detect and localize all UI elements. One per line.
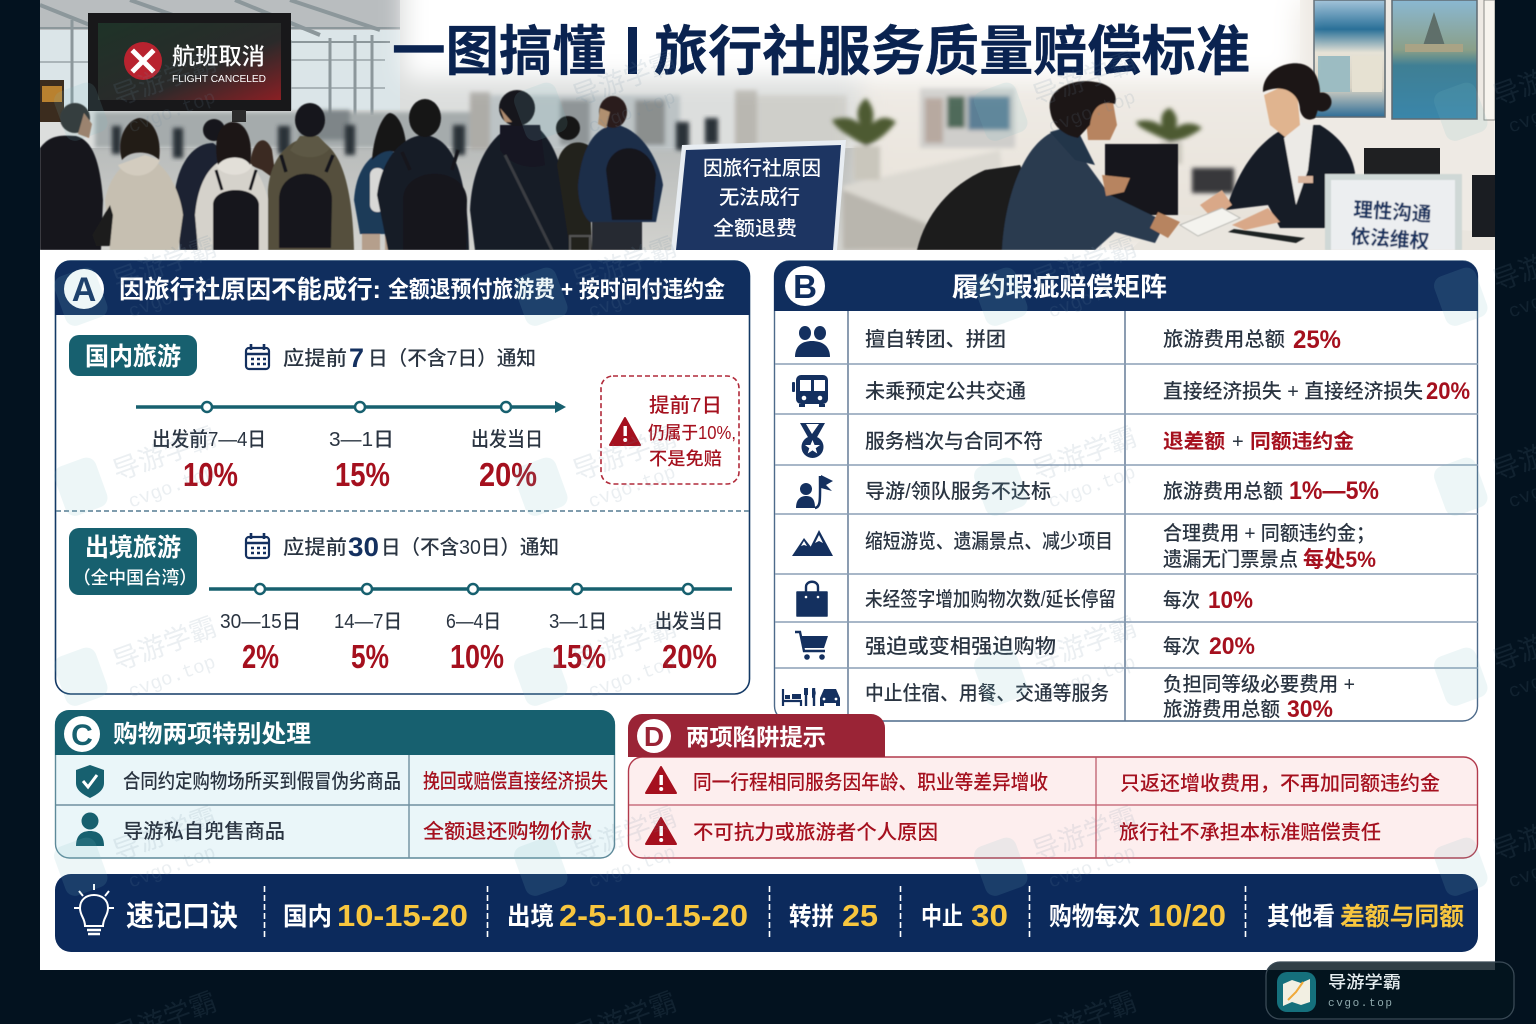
- row: counterfeit goods: 挽回或赔偿直接经济损失: [423, 770, 608, 793]
- outbound tag: [69, 528, 197, 595]
- outbound compensation tiers: 10%: [450, 638, 504, 675]
- outbound timeline: [209, 584, 732, 594]
- desk sign: rational communication: 依法维权: [1350, 225, 1430, 253]
- icon: medal: [800, 423, 825, 458]
- mnemonic: transfer: 转拼: [789, 903, 834, 931]
- domestic timeline: [136, 401, 566, 413]
- brand badge: [1266, 962, 1514, 1019]
- watermark pattern: cvgo.top: [1046, 87, 1139, 138]
- traveller behind woman: [250, 140, 276, 180]
- traveller 4: [195, 122, 274, 250]
- watermark pattern: cvgo.top: [126, 462, 219, 513]
- mnemonic: domestic: 国内: [283, 903, 332, 931]
- watermark pattern: cvgo.top: [586, 462, 679, 513]
- outbound compensation tiers: 30—15日: [220, 611, 301, 633]
- row: service grade: 服务档次与合同不符: [865, 430, 1043, 453]
- outbound compensation tiers: 6—4日: [446, 611, 501, 633]
- row: shortened itinerary: 每处5%: [1303, 547, 1376, 572]
- panel A header: 全额退预付旅游费 + 按时间付违约金: [388, 276, 725, 302]
- mnemonic: others: 差额与同额: [1340, 903, 1464, 931]
- mnemonic: outbound: 出境: [507, 903, 554, 931]
- panel C header: 购物两项特别处理: [113, 721, 311, 748]
- mnemonic: others: 其他看: [1267, 903, 1335, 931]
- icon: calendar: [246, 344, 269, 369]
- blue refund notice sign: 全额退费: [713, 217, 797, 240]
- queue of travellers seen from behind: [40, 90, 663, 250]
- icon: warning: [646, 767, 676, 793]
- panel C header: C: [71, 719, 93, 752]
- brand badge: cvgo.top: [1328, 998, 1392, 1010]
- office wall background: [832, 0, 1500, 250]
- row: public transport: [792, 375, 1470, 407]
- outbound notice: 应提前: [283, 536, 347, 559]
- row: forced shopping: [795, 632, 1255, 660]
- watermark pattern: cvgo.top: [586, 652, 679, 703]
- domestic notice: 日（不含7日）通知: [368, 347, 536, 370]
- blue refund notice sign: 因旅行社原因: [703, 157, 821, 180]
- row: unauthorised group transfer: [795, 326, 1341, 357]
- watermark pattern: 导游学霸: [1029, 801, 1141, 867]
- row: guide private sales: 导游私自兜售商品: [123, 820, 285, 843]
- row: counterfeit goods: [76, 765, 608, 798]
- row: shortened itinerary: 合理费用 + 同额违约金；: [1163, 522, 1375, 545]
- outbound compensation tiers: 3—1日: [549, 611, 607, 633]
- row: service grade: +: [1232, 431, 1244, 453]
- icon: bed, fork and car: [783, 688, 840, 706]
- traveller 2: [92, 118, 183, 250]
- panel B header: B: [793, 268, 817, 305]
- watermark pattern: 导游学霸: [109, 231, 221, 297]
- watermark pattern: 导游学霸: [569, 801, 681, 867]
- row: extra shopping: [797, 582, 1253, 616]
- outbound tag: 出境旅游: [85, 534, 181, 562]
- watermark pattern: 导游学霸: [1029, 611, 1141, 677]
- icon: red x: [124, 42, 162, 80]
- row: public transport: 直接经济损失 + 直接经济损失: [1163, 380, 1423, 403]
- travel posters: [1314, 0, 1495, 120]
- row: forced shopping: 20%: [1209, 633, 1255, 660]
- row: suspended services: 30%: [1287, 696, 1333, 723]
- outbound compensation tiers: 20%: [662, 638, 717, 675]
- watermark pattern: cvgo.top: [1046, 462, 1139, 513]
- title: [392, 22, 1250, 82]
- panel C: shopping special cases: [55, 710, 615, 858]
- counter desk: [1130, 246, 1300, 250]
- traveller 9: [556, 116, 592, 250]
- mnemonic bar: 速记口诀: [126, 900, 238, 933]
- row: guide standard: 1%—5%: [1289, 477, 1379, 505]
- icon: shield: [76, 765, 104, 798]
- callout: seven days note: 提前7日: [649, 394, 722, 417]
- title: 一图搞懂: [392, 22, 606, 82]
- domestic compensation tiers: 10%: [183, 456, 238, 493]
- watermark pattern: 导游学霸: [1029, 46, 1141, 112]
- mnemonic: outbound: 2-5-10-15-20: [559, 898, 748, 933]
- mnemonic: suspension: 30: [971, 898, 1008, 933]
- icon: light bulb: [74, 884, 114, 934]
- title: 旅行社服务质量赔偿标准: [654, 22, 1250, 82]
- watermark pattern: cvgo.top: [586, 272, 679, 323]
- mnemonic: suspension: [921, 898, 1008, 933]
- watermark pattern: 导游学霸: [109, 421, 221, 487]
- row: suspended services: 旅游费用总额: [1163, 698, 1280, 721]
- row: shortened itinerary: [792, 522, 1376, 572]
- icon: shopping bag: [797, 582, 827, 616]
- desk sign: rational communication: [1325, 174, 1462, 253]
- header banner photo scene: [40, 0, 1500, 253]
- row: price discrimination: 同一行程相同服务因年龄、职业等差异增收: [693, 771, 1048, 794]
- row: guide private sales: [76, 812, 592, 846]
- icon: calendar: [246, 533, 269, 558]
- watermark pattern: cvgo.top: [126, 87, 219, 138]
- domestic notice: 7: [349, 343, 364, 373]
- watermark pattern: cvgo.top: [126, 272, 219, 323]
- row: guide standard: [796, 475, 1379, 508]
- panel D header tab: [628, 714, 885, 757]
- row: service grade: 同额违约金: [1250, 429, 1354, 453]
- domestic compensation tiers: 15%: [335, 456, 390, 493]
- watermark pattern: cvgo.top: [586, 87, 679, 138]
- back monitor: [1364, 148, 1440, 175]
- blue refund notice sign: [671, 140, 846, 250]
- icon: person: [76, 812, 104, 846]
- icon: bus: [792, 375, 828, 407]
- suitcase handle: [570, 236, 590, 250]
- row: force majeure: [646, 818, 1381, 844]
- mnemonic: others: [1267, 903, 1464, 931]
- row: shortened itinerary: 缩短游览、遗漏景点、减少项目: [865, 530, 1113, 553]
- traveller 5: [268, 103, 354, 250]
- domestic compensation tiers: 3—1日: [329, 429, 394, 451]
- panel C header: [55, 710, 615, 755]
- mnemonic bar: [55, 874, 1478, 952]
- outbound compensation tiers: 5%: [351, 638, 389, 675]
- row: force majeure: 旅行社不承担本标准赔偿责任: [1119, 821, 1381, 844]
- row: extra shopping: 10%: [1208, 587, 1253, 614]
- contract paper: [1180, 208, 1240, 236]
- icon: warning: [646, 818, 676, 844]
- mnemonic: transfer: [789, 898, 878, 933]
- watermark pattern: cvgo.top: [1046, 842, 1139, 893]
- traveller 8: [470, 90, 571, 250]
- traveller 10: [578, 96, 663, 250]
- mnemonic: domestic: [283, 898, 468, 933]
- panel A header: 因旅行社原因不能成行:: [119, 276, 381, 304]
- watermark pattern: 导游学霸: [569, 46, 681, 112]
- traveller 7: [377, 99, 469, 250]
- domestic tag: 国内旅游: [85, 343, 181, 371]
- traveller 6: [354, 113, 406, 250]
- panel B header: [774, 261, 1478, 311]
- traveller 1: [40, 103, 103, 250]
- white title fade: [405, 0, 1295, 78]
- row: force majeure: 不可抗力或旅游者个人原因: [693, 821, 938, 844]
- icon: warning: [610, 418, 640, 445]
- row: counterfeit goods: 合同约定购物场所买到假冒伪劣商品: [123, 770, 401, 793]
- potted plants: [832, 98, 1202, 180]
- watermark pattern: cvgo.top: [1046, 652, 1139, 703]
- watermark pattern: 导游学霸: [569, 231, 681, 297]
- consultant: [1200, 63, 1356, 230]
- flight cancelled sign: [88, 13, 291, 122]
- row: public transport: 20%: [1426, 378, 1470, 405]
- panel A header: [55, 261, 750, 315]
- flight cancelled sign: FLIGHT CANCELED: [172, 73, 266, 85]
- outbound compensation tiers: 14—7日: [334, 611, 402, 633]
- mnemonic: shopping: 10/20: [1148, 898, 1226, 933]
- watermark pattern: 导游学霸: [569, 611, 681, 677]
- row: guide standard: 旅游费用总额: [1163, 480, 1283, 503]
- row: suspended services: [783, 673, 1355, 723]
- callout: seven days note: [601, 376, 739, 484]
- callout: seven days note: 仍属于10%,: [648, 423, 736, 443]
- row: public transport: 未乘预定公共交通: [865, 380, 1026, 403]
- watermark pattern: 导游学霸: [569, 421, 681, 487]
- panel A: cannot depart: [55, 261, 750, 694]
- mnemonic: transfer: 25: [842, 898, 878, 933]
- blue refund notice sign: 无法成行: [719, 186, 800, 209]
- domestic compensation tiers: 出发前7—4日: [152, 428, 266, 451]
- airport hall background: [40, 0, 900, 250]
- watermark pattern: 导游学霸: [109, 46, 221, 112]
- row: extra shopping: 未经签字增加购物次数/延长停留: [865, 588, 1116, 611]
- tablet: [1228, 229, 1305, 243]
- desk sign: rational communication: 理性沟通: [1353, 198, 1432, 226]
- brand badge: 导游学霸: [1328, 972, 1401, 992]
- row: unauthorised group transfer: 擅自转团、拼团: [865, 328, 1006, 351]
- service counter scene: [917, 63, 1462, 253]
- mnemonic: shopping: [1049, 898, 1226, 933]
- monitor: [1105, 144, 1178, 215]
- watermark pattern: cvgo.top: [126, 842, 219, 893]
- row: suspended services: 中止住宿、用餐、交通等服务: [865, 682, 1109, 705]
- outbound notice: 日（不含30日）通知: [381, 536, 559, 559]
- callout: seven days note: 不是免赔: [649, 449, 722, 469]
- watermark pattern: cvgo.top: [126, 652, 219, 703]
- outbound compensation tiers: 2%: [242, 638, 279, 675]
- watermark pattern: 导游学霸: [109, 611, 221, 677]
- watermark pattern: cvgo.top: [586, 842, 679, 893]
- panel B: defect compensation matrix: [774, 261, 1478, 723]
- icon: map logo: [1277, 972, 1316, 1012]
- domestic notice: 应提前: [283, 347, 347, 370]
- domestic notice: [283, 343, 536, 373]
- panel B header: 履约瑕疵赔偿矩阵: [952, 272, 1167, 302]
- panel A header: A: [72, 271, 96, 309]
- row: price discrimination: [646, 767, 1440, 795]
- row: guide standard: 导游/领队服务不达标: [865, 480, 1051, 503]
- outbound compensation tiers: 出发当日: [655, 610, 723, 633]
- row: forced shopping: 强迫或变相强迫购物: [865, 635, 1056, 658]
- customer: [917, 81, 1180, 250]
- icon: people: [795, 326, 830, 357]
- outbound tag: （全中国台湾）: [73, 567, 197, 588]
- watermark pattern: 导游学霸: [1029, 421, 1141, 487]
- row: extra shopping: 每次: [1163, 589, 1200, 612]
- watermark pattern: cvgo.top: [1046, 272, 1139, 323]
- row: service grade: [800, 423, 1354, 458]
- watermark pattern: 导游学霸: [1029, 231, 1141, 297]
- outbound notice: [283, 532, 559, 562]
- outbound notice: 30: [348, 532, 379, 562]
- icon: guide with flag: [796, 475, 833, 508]
- row: service grade: 退差额: [1163, 430, 1225, 453]
- panel D header tab: 两项陷阱提示: [686, 724, 826, 750]
- row: unauthorised group transfer: 25%: [1293, 326, 1341, 354]
- domestic compensation tiers: 出发当日: [471, 428, 543, 451]
- watermark pattern: 导游学霸: [109, 801, 221, 867]
- row: forced shopping: 每次: [1163, 635, 1200, 658]
- row: shortened itinerary: 遗漏无门票景点: [1163, 548, 1298, 571]
- row: suspended services: 负担同等级必要费用 +: [1163, 673, 1355, 696]
- domestic compensation tiers: [152, 428, 543, 493]
- icon: cart: [795, 632, 828, 660]
- panel D header tab: D: [644, 721, 664, 752]
- panel D: two traps: [628, 714, 1478, 858]
- row: guide private sales: 全额退还购物价款: [423, 820, 592, 843]
- mnemonic: suspension: 中止: [921, 903, 963, 931]
- mnemonic: domestic: 10-15-20: [337, 898, 468, 933]
- icon: mountains: [792, 530, 833, 556]
- traveller 3: [175, 119, 228, 250]
- outbound compensation tiers: 15%: [552, 638, 606, 675]
- mnemonic: shopping: 购物每次: [1049, 903, 1140, 931]
- outbound compensation tiers: [220, 610, 723, 675]
- flight cancelled sign: 航班取消: [172, 43, 265, 69]
- row: unauthorised group transfer: 旅游费用总额: [1163, 328, 1285, 351]
- domestic compensation tiers: 20%: [479, 456, 537, 493]
- row: price discrimination: 只返还增收费用，不再加同额违约金: [1120, 772, 1440, 795]
- domestic tag: [69, 335, 197, 376]
